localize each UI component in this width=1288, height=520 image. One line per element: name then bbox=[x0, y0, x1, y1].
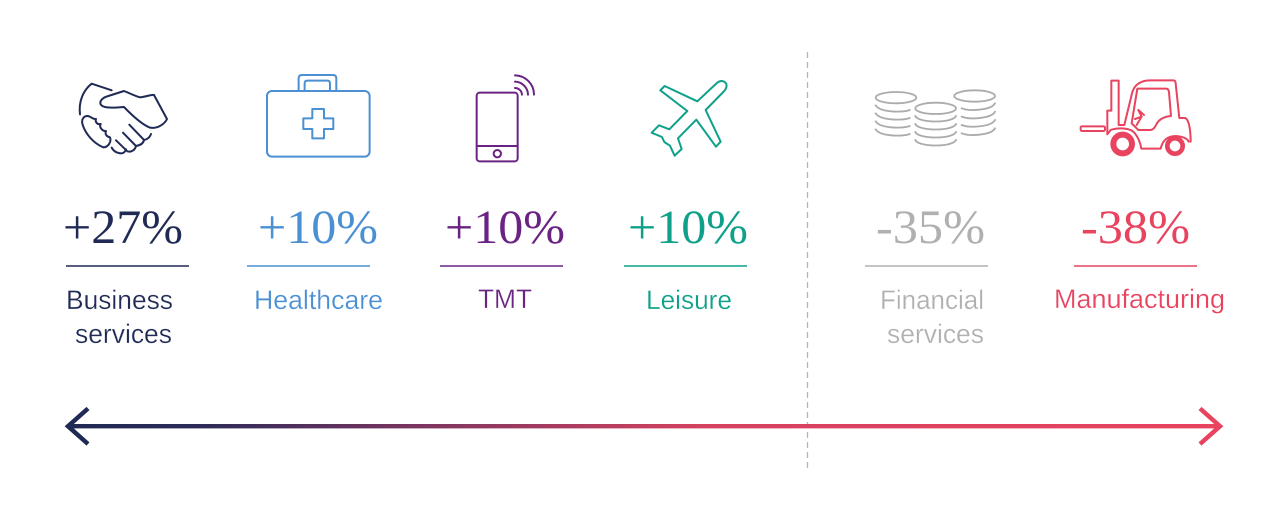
label: Financial services: services bbox=[887, 319, 984, 349]
icon: forklift bbox=[1081, 80, 1191, 154]
column: Business services bbox=[63, 84, 189, 349]
column: Leisure bbox=[624, 81, 748, 315]
label: Financial services bbox=[880, 285, 984, 349]
label: Business services bbox=[66, 285, 173, 349]
column: Financial services bbox=[865, 90, 995, 349]
value: -35%: -35% bbox=[876, 201, 985, 254]
label: Manufacturing: Manufacturing bbox=[1054, 284, 1225, 314]
icon: airplane bbox=[652, 81, 727, 156]
value: +10%: +10% bbox=[628, 201, 748, 254]
icon: smartphone with signal bbox=[477, 75, 534, 161]
value: +27%: +27% bbox=[63, 201, 183, 254]
icon: coin stacks bbox=[876, 90, 995, 145]
column: TMT bbox=[440, 75, 565, 314]
label: Business services: Business bbox=[66, 285, 173, 315]
icon: medical case bbox=[267, 75, 370, 157]
value: +10%: +10% bbox=[258, 201, 378, 254]
icon: handshake bbox=[80, 84, 167, 153]
column: Manufacturing bbox=[1054, 80, 1225, 314]
label: Business services: services bbox=[75, 319, 172, 349]
label: Financial services: Financial bbox=[880, 285, 984, 315]
label: Leisure: Leisure bbox=[646, 285, 732, 315]
column: Healthcare bbox=[247, 75, 383, 315]
arrow: double-headed gradient bbox=[68, 408, 1220, 444]
label: Healthcare: Healthcare bbox=[254, 285, 383, 315]
label: TMT: TMT bbox=[478, 284, 532, 314]
divider: dashed vertical line bbox=[806, 52, 808, 468]
value: -38%: -38% bbox=[1081, 201, 1190, 254]
value: +10%: +10% bbox=[445, 201, 565, 254]
